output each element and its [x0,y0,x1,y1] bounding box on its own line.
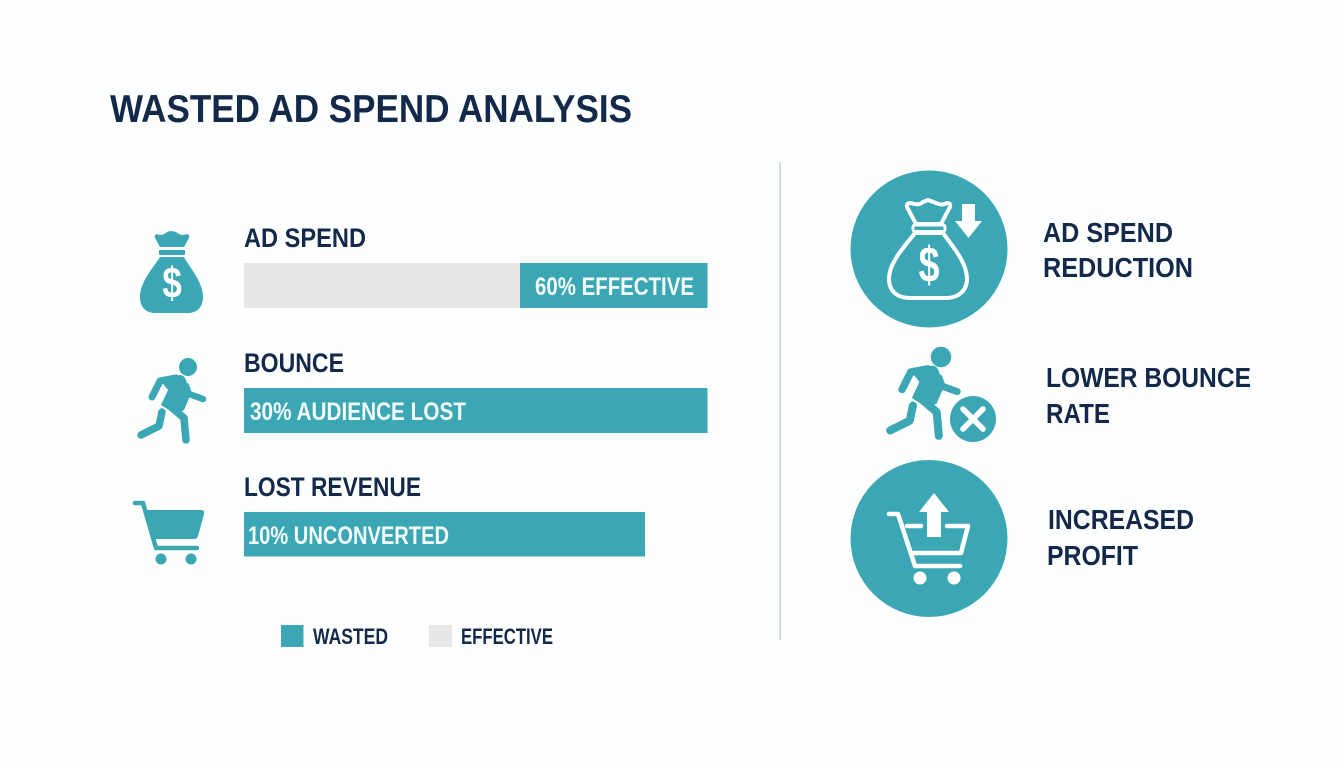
row: ad spend [140,223,708,313]
row: bounce [141,348,708,440]
label: ad spend: AD SPEND [244,223,366,253]
item: lower bounce rate [890,347,1251,442]
icon: shopping cart [135,503,204,564]
label: increased profit: INCREASED [1048,504,1194,535]
label: ad spend reduction: REDUCTION [1043,252,1193,283]
bar: bounce: 30% AUDIENCE LOST [250,398,466,426]
bar: ad spend: 60% EFFECTIVE [535,273,694,301]
legend: effective [429,624,553,649]
icon: money bag with down arrow: $ [919,238,939,293]
label: bounce: BOUNCE [244,348,344,378]
label: increased profit [1047,504,1194,571]
icon: money bag with down arrow [850,170,1008,328]
bar: lost revenue [244,512,645,556]
legend [281,624,553,649]
bar: lost revenue: 10% UNCONVERTED [248,522,449,550]
row: lost revenue [135,472,645,564]
panel: wasted spend breakdown [135,223,708,649]
icon: money bag [140,231,203,313]
bar: bounce [244,388,708,433]
label: increased profit: PROFIT [1047,540,1138,571]
icon: running person [141,358,203,440]
label: lost revenue: LOST REVENUE [244,472,421,502]
bar: ad spend [244,263,708,308]
legend: wasted: WASTED [313,624,388,649]
legend: wasted [281,624,388,649]
legend: effective: EFFECTIVE [461,624,553,649]
label: ad spend reduction [1043,217,1193,283]
title: WASTED AD SPEND ANALYSIS [110,88,632,131]
label: lower bounce rate [1046,362,1251,429]
label: lower bounce rate: LOWER BOUNCE [1046,362,1251,393]
icon: runner with x [890,347,996,442]
icon: cart with up arrow [850,460,1008,617]
item: increased profit [850,460,1194,617]
item: ad spend reduction [850,170,1193,328]
panel: improvements [850,170,1251,617]
icon: money bag: $ [162,259,182,308]
label: ad spend reduction: AD SPEND [1043,217,1173,248]
label: lower bounce rate: RATE [1046,398,1110,429]
